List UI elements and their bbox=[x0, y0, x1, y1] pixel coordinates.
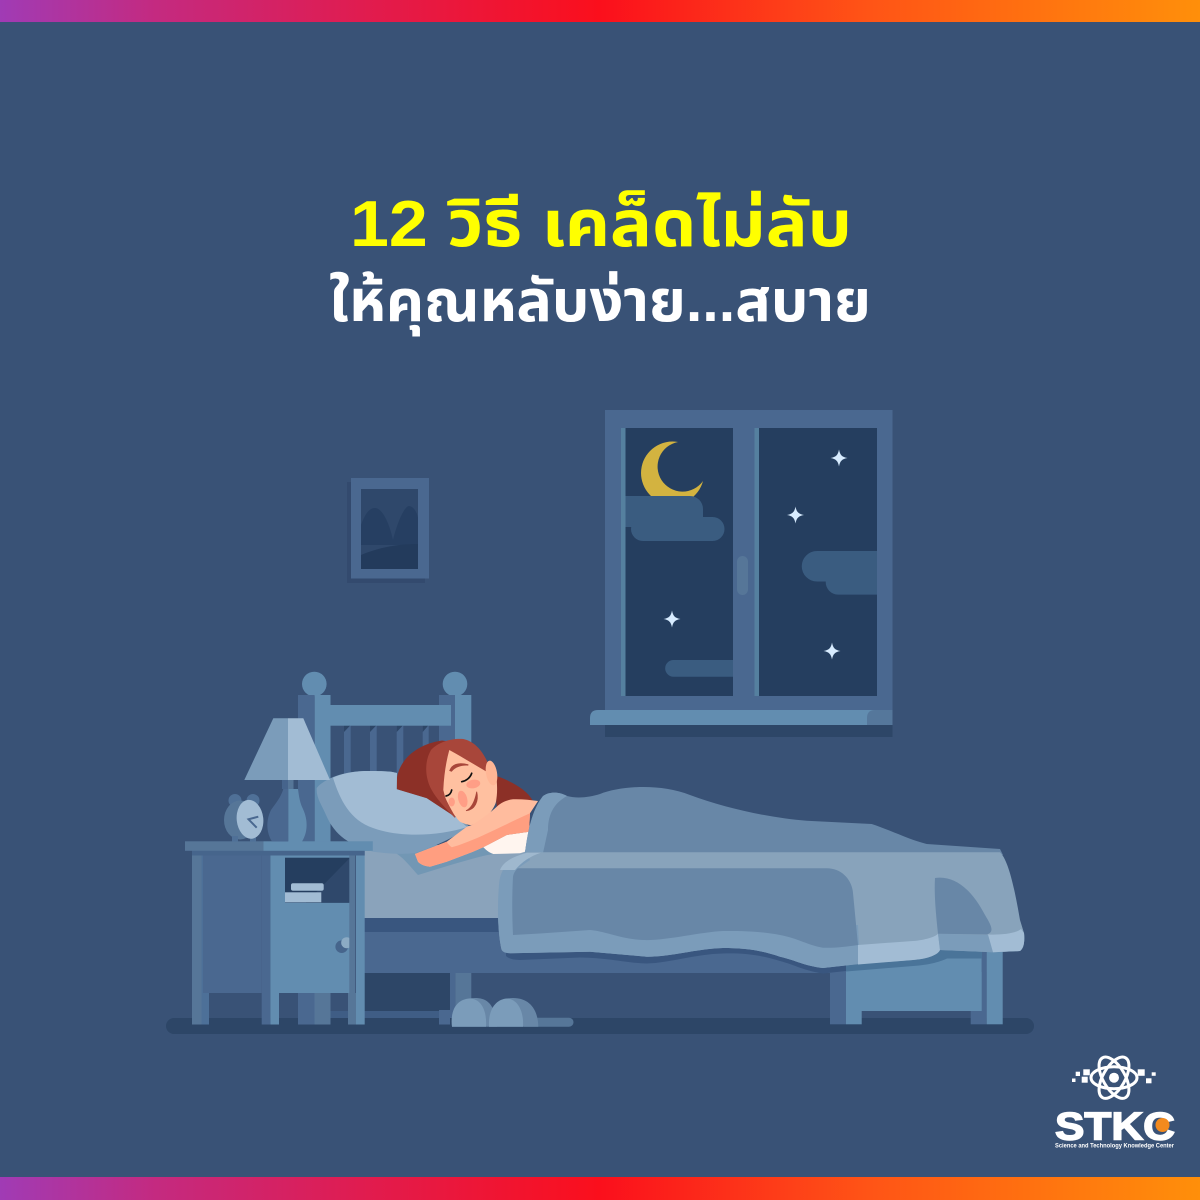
blanket side bbox=[498, 852, 1024, 968]
mouth bbox=[466, 792, 477, 811]
slippers bbox=[452, 998, 574, 1027]
lamp shade right bbox=[288, 718, 330, 780]
books bbox=[285, 883, 324, 902]
slipper tail shadow bbox=[520, 1018, 574, 1027]
blanket light hem bbox=[858, 934, 940, 964]
closed eyes bbox=[462, 773, 472, 782]
table lamp bbox=[244, 718, 330, 842]
wall picture bbox=[347, 478, 429, 583]
left bed post bbox=[298, 695, 330, 1024]
bottom gradient bar bbox=[0, 1177, 1200, 1200]
stars bbox=[664, 450, 848, 660]
nightstand right leg bbox=[349, 851, 355, 993]
headboard knobs bbox=[302, 672, 327, 696]
top gradient bar bbox=[0, 0, 1200, 22]
blanket hem bbox=[498, 853, 860, 968]
title bbox=[329, 187, 871, 336]
shelf opening bbox=[285, 858, 350, 903]
door knob bbox=[335, 937, 352, 953]
sheet fold shadow bbox=[364, 845, 530, 875]
logo dot bbox=[1156, 1118, 1170, 1132]
alarm clock bbox=[224, 794, 265, 842]
bed frame bbox=[360, 932, 840, 973]
blanket top bbox=[525, 787, 1003, 855]
shoulder and arm bbox=[415, 799, 538, 867]
front hair bbox=[426, 739, 488, 818]
window sill bbox=[605, 725, 892, 737]
headboard slats bbox=[344, 725, 429, 795]
left glass pane bbox=[621, 428, 733, 696]
right slipper bbox=[489, 998, 538, 1027]
blanket right fold bbox=[935, 878, 991, 934]
clouds bbox=[626, 496, 877, 677]
woman bbox=[415, 739, 538, 867]
forearm shade bbox=[415, 813, 530, 867]
logo atom bbox=[1091, 1052, 1137, 1103]
blanket shadow on frame bbox=[506, 945, 846, 974]
clock face bbox=[235, 799, 265, 840]
mattress bbox=[360, 851, 545, 918]
left slipper bbox=[452, 998, 497, 1027]
nose blush bbox=[456, 790, 469, 808]
blanket bbox=[498, 787, 1024, 968]
nightstand left panel bbox=[203, 855, 262, 993]
blanket right hem bbox=[938, 929, 1024, 952]
blanket left strip bbox=[525, 793, 567, 853]
logo wordmark: STKC bbox=[1055, 1106, 1175, 1148]
logo bbox=[1055, 1052, 1175, 1150]
title line 1: 12 วิธี เคล็ดไม่ลับ bbox=[350, 187, 852, 260]
ear bbox=[484, 760, 499, 786]
blanket shadow on panel bbox=[846, 950, 982, 972]
shadow under top bbox=[192, 850, 365, 856]
nightstand top bbox=[185, 841, 264, 851]
nightstand bbox=[185, 841, 373, 1024]
woman hair back bbox=[396, 740, 533, 815]
nightstand left leg bbox=[192, 851, 202, 1024]
cheek blush bbox=[466, 779, 481, 789]
title line 2: ให้คุณหลับง่าย...สบาย bbox=[329, 268, 871, 336]
blanket top-left corner highlight bbox=[500, 853, 541, 870]
bed bbox=[298, 672, 1003, 1024]
window bbox=[590, 410, 892, 737]
lamp shade left bbox=[244, 718, 288, 780]
clock hands bbox=[248, 817, 258, 828]
lamp neck bbox=[282, 780, 288, 789]
window handle bbox=[737, 556, 748, 595]
floor shadow bbox=[166, 1018, 1034, 1034]
logo pixels bbox=[1072, 1069, 1156, 1083]
right bed leg and panel bbox=[830, 952, 1003, 1024]
pillow bbox=[317, 771, 470, 854]
lamp vase bbox=[267, 789, 288, 842]
blanket inner panel bbox=[512, 868, 858, 948]
foot post at head end bbox=[439, 973, 471, 1024]
headboard rail bbox=[330, 705, 451, 726]
nightstand middle leg bbox=[262, 851, 270, 1024]
nightstand door bbox=[270, 851, 354, 993]
face bbox=[443, 750, 497, 825]
eyebrow bbox=[450, 764, 468, 771]
moon bbox=[641, 442, 703, 505]
logo tagline: Science and Technology Knowledge Center bbox=[1055, 1142, 1174, 1150]
window frame bbox=[605, 410, 892, 710]
under-bed shadow bbox=[364, 973, 452, 1011]
right bed post bbox=[439, 695, 471, 775]
right glass pane bbox=[754, 428, 877, 696]
white top bbox=[483, 832, 529, 854]
